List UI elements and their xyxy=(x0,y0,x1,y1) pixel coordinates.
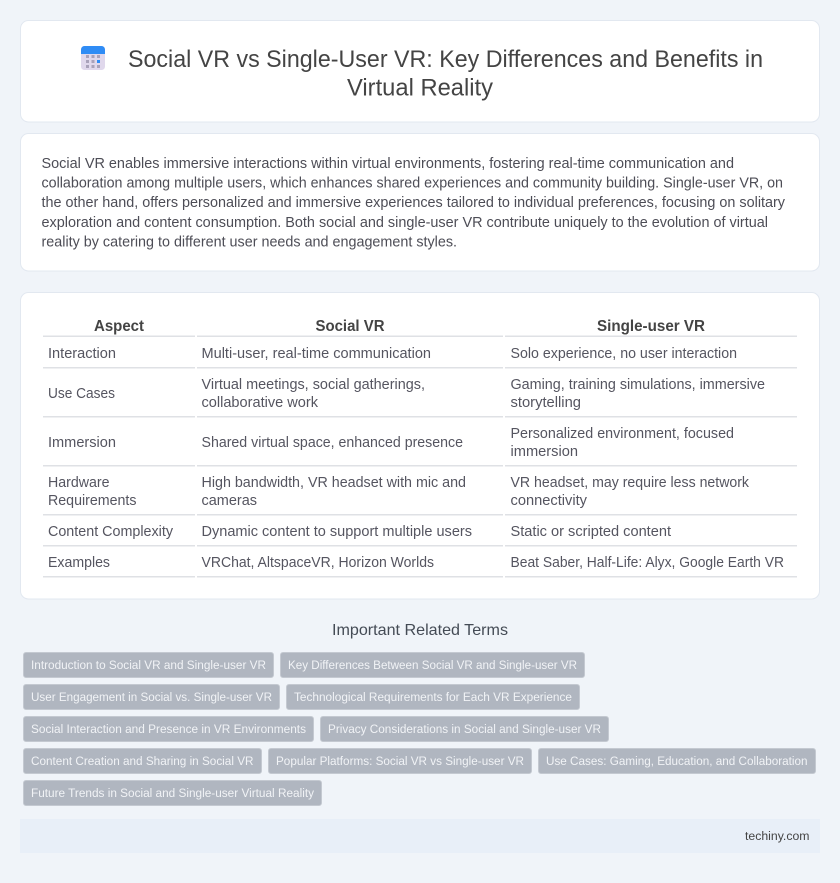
tag xyxy=(268,748,532,774)
panel: comparison table xyxy=(20,292,820,599)
row: Immersion: Immersion xyxy=(48,435,116,451)
row: Hardware Requirements: connectivity xyxy=(510,493,588,509)
row: Use Cases: collaborative work xyxy=(202,395,319,411)
description text: reality by catering to different user needs and engagement styles. xyxy=(42,234,457,250)
row: Interaction xyxy=(48,346,737,362)
row: Interaction: Solo experience, no user interaction xyxy=(510,346,737,362)
row: Content Complexity: Content Complexity xyxy=(48,524,174,540)
tag xyxy=(280,652,584,678)
tag xyxy=(24,748,262,774)
row: Use Cases: Virtual meetings, social gatherings, xyxy=(202,377,425,393)
tag: Privacy Considerations in Social and Single-user VR xyxy=(328,722,601,736)
title xyxy=(128,46,763,102)
row: Immersion: immersion xyxy=(510,444,578,460)
row: Content Complexity: Static or scripted content xyxy=(510,524,671,540)
tag xyxy=(538,748,816,774)
description text: exploration and content consumption. Both social and single-user VR contribute uniquely to the evolution of virtual xyxy=(42,215,768,231)
heading: related terms: Important Related Terms xyxy=(332,622,508,639)
row: Hardware Requirements: VR headset, may require less network xyxy=(510,475,750,491)
table header row: Aspect xyxy=(94,318,145,335)
row: Content Complexity: Dynamic content to support multiple users xyxy=(202,524,472,540)
tag: Popular Platforms: Social VR vs Single-user VR xyxy=(276,754,524,768)
table header row: Single-user VR xyxy=(597,318,705,335)
tag: Introduction to Social VR and Single-user VR xyxy=(31,658,266,672)
icon: calendar xyxy=(81,46,105,70)
row: Interaction: Interaction xyxy=(48,346,116,362)
description text xyxy=(42,156,786,250)
row: Interaction: Multi-user, real-time communication xyxy=(202,346,431,362)
tag: Technological Requirements for Each VR Experience xyxy=(294,690,572,704)
row: Hardware Requirements: High bandwidth, VR headset with mic and xyxy=(202,475,466,491)
row: Hardware Requirements: Requirements xyxy=(48,493,136,509)
table header row xyxy=(94,318,705,335)
tag xyxy=(24,652,274,678)
tag: Content Creation and Sharing in Social VR xyxy=(31,754,254,768)
title: Virtual Reality xyxy=(347,74,494,102)
tag: Social Interaction and Presence in VR Environments xyxy=(31,722,306,736)
tag xyxy=(24,684,280,710)
footer: techiny.com xyxy=(745,829,810,843)
description text: collaboration among multiple users, which enhances shared experiences and community building. Single-user VR, on xyxy=(42,176,783,192)
row: Use Cases: Use Cases xyxy=(48,386,115,402)
row: Examples: Beat Saber, Half-Life: Alyx, Google Earth VR xyxy=(510,555,784,571)
row: Hardware Requirements: cameras xyxy=(202,493,257,509)
related term tags xyxy=(24,652,816,806)
tag xyxy=(24,780,322,806)
panel: description xyxy=(20,134,820,271)
description text: Social VR enables immersive interactions within virtual environments, fostering real-time communication and xyxy=(42,156,734,172)
panel: title header xyxy=(20,20,820,122)
tag xyxy=(24,716,314,742)
row: Use Cases xyxy=(48,377,765,411)
row: Hardware Requirements xyxy=(48,475,750,509)
row: Content Complexity xyxy=(48,524,671,540)
tag: User Engagement in Social vs. Single-user VR xyxy=(31,690,272,704)
row: Examples: Examples xyxy=(48,555,110,571)
row: Use Cases: storytelling xyxy=(510,395,581,411)
tag xyxy=(320,716,608,742)
row: Examples: VRChat, AltspaceVR, Horizon Worlds xyxy=(202,555,434,571)
table header row: Social VR xyxy=(316,318,385,335)
row: Immersion: Personalized environment, focused xyxy=(510,426,734,442)
row: Use Cases: Gaming, training simulations, immersive xyxy=(510,377,765,393)
row: Immersion: Shared virtual space, enhanced presence xyxy=(202,435,463,451)
row: Examples xyxy=(48,555,784,571)
row: Hardware Requirements: Hardware xyxy=(48,475,110,491)
tag xyxy=(286,684,580,710)
tag: Future Trends in Social and Single-user Virtual Reality xyxy=(31,786,315,800)
tag: Key Differences Between Social VR and Single-user VR xyxy=(288,658,577,672)
title: Social VR vs Single-User VR: Key Differences and Benefits in xyxy=(128,46,763,73)
description text: the other hand, offers personalized and immersive experiences tailored to individual preferences, focusing on solitary xyxy=(42,195,786,211)
tag: Use Cases: Gaming, Education, and Collaboration xyxy=(546,754,808,768)
row: Immersion xyxy=(48,426,734,460)
footer xyxy=(20,819,820,853)
